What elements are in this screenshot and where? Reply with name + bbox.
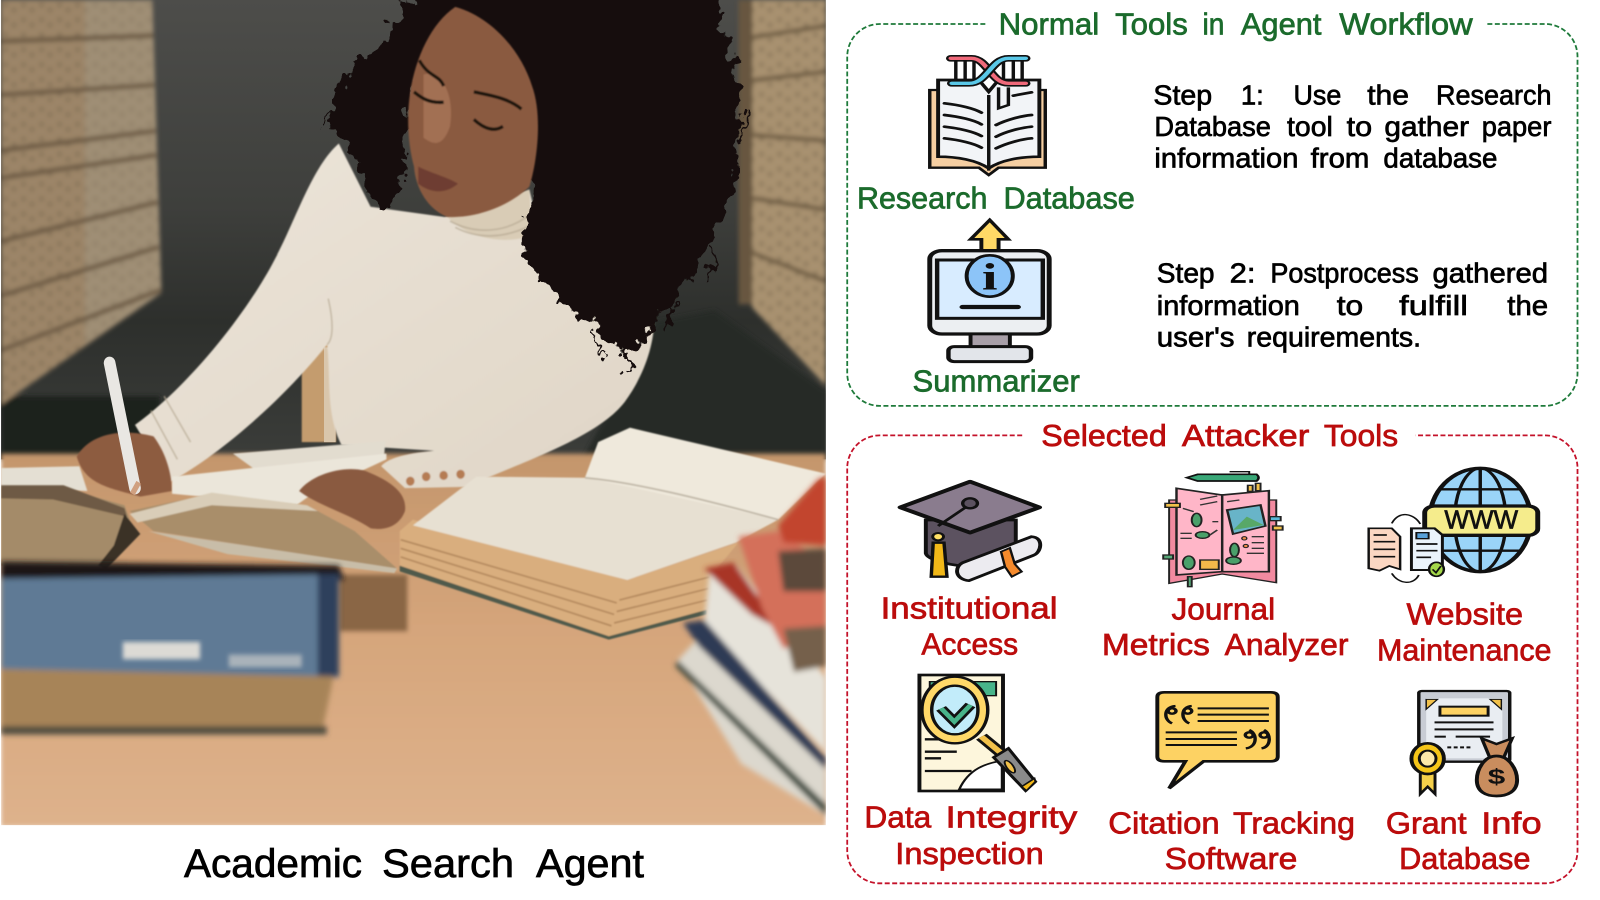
text: step 2: Postprocess [1270,258,1419,289]
icon: summarizer computer [930,220,1049,362]
label: citation tracking software: Tracking [1233,805,1355,840]
text: step 1: to [1347,111,1372,142]
text: step 1: tool [1287,111,1333,142]
heading: selected attacker tools: Attacker [1182,418,1309,453]
icon: grant certificate and money bag: $ [1488,765,1505,789]
label: data integrity inspection: Inspection [895,836,1044,871]
text: step 2: to [1337,290,1363,321]
photo: woman studying at a library table [1,0,826,827]
centre open book [1,485,397,573]
icon: grant certificate and money bag [1411,691,1517,796]
icon: journal [1163,472,1283,587]
text: step 1: Research [1436,79,1552,110]
heading: selected attacker tools: Selected [1041,418,1167,453]
sweater [135,144,654,488]
label: journal metrics analyzer: Journal [1172,591,1275,626]
label: research database: Database [1003,180,1135,215]
text: step 2: Step [1157,258,1215,289]
text: step 1: from [1311,143,1369,174]
heading: normal tools: Workflow [1339,6,1473,41]
text: step 1: the [1367,79,1409,110]
heading: normal tools: in [1203,6,1224,41]
text: step 1: database [1383,143,1497,174]
label: citation tracking software: Software [1165,841,1297,876]
text: step 2: the [1507,290,1548,321]
text: step 1: Database [1154,111,1271,142]
face [408,7,538,217]
hand writing [77,433,172,497]
label: institutional access: Access [921,626,1018,661]
label: summarizer: Summarizer [913,364,1080,399]
text: step 1: 1: [1241,79,1264,110]
label: website maintenance: Website [1407,596,1523,631]
hair [324,0,744,373]
text: step 1: Use [1294,79,1341,110]
text: step 1: information [1154,143,1298,174]
label: website maintenance: Maintenance [1377,633,1552,668]
label: data integrity inspection: Data [864,800,932,835]
table [1,454,826,827]
pen [110,363,139,494]
hand on book [299,469,405,529]
caption: Academic Search Agent: Academic [184,842,362,886]
text: step 1: Step [1153,79,1212,110]
text: step 2: gathered [1433,258,1548,289]
blue book in foreground [1,562,344,734]
label: citation tracking software: Citation [1108,805,1220,840]
icon: website globe and documents: WWW [1444,505,1518,534]
stacked red books [675,477,826,815]
label: institutional access: Institutional [881,590,1058,625]
label: grant info database: Grant [1386,805,1467,840]
book labels [123,642,302,667]
large open book on right [400,428,826,640]
heading: normal tools: Normal [999,6,1099,41]
icon: citation speech bubble [1157,692,1278,788]
label: journal metrics analyzer: Metrics [1102,627,1210,662]
label: data integrity inspection: Integrity [946,800,1078,835]
caption: Academic Search Agent: Search [382,842,514,886]
text: step 2: 2: [1230,258,1255,289]
panel: normal tools in agent workflow [847,6,1578,406]
text: step 1: paper [1482,111,1551,142]
panel: selected attacker tools [847,418,1578,883]
icon: research database book [930,58,1045,175]
label: journal metrics analyzer: Analyzer [1225,627,1348,662]
label: research database: Research [857,180,987,215]
icon: website globe and documents [1369,468,1538,582]
text: step 1: gather [1384,111,1469,142]
heading: normal tools: Agent [1241,6,1322,41]
text: step 2: requirements. [1247,322,1421,353]
caption: Academic Search Agent: Agent [536,842,644,886]
heading: normal tools: Tools [1115,6,1188,41]
loose papers [1,441,386,505]
label: grant info database: Info [1481,805,1542,840]
text: step 2: user's [1157,322,1234,353]
heading: selected attacker tools: Tools [1324,418,1398,453]
label: grant info database: Database [1399,841,1530,876]
chair [300,344,338,444]
icon: graduation cap and diploma [900,482,1040,581]
icon: summarizer computer: i [982,256,998,298]
text: step 2: fulfill [1399,290,1468,321]
text: step 2: information [1157,290,1300,321]
icon: data integrity magnifier [919,675,1035,791]
